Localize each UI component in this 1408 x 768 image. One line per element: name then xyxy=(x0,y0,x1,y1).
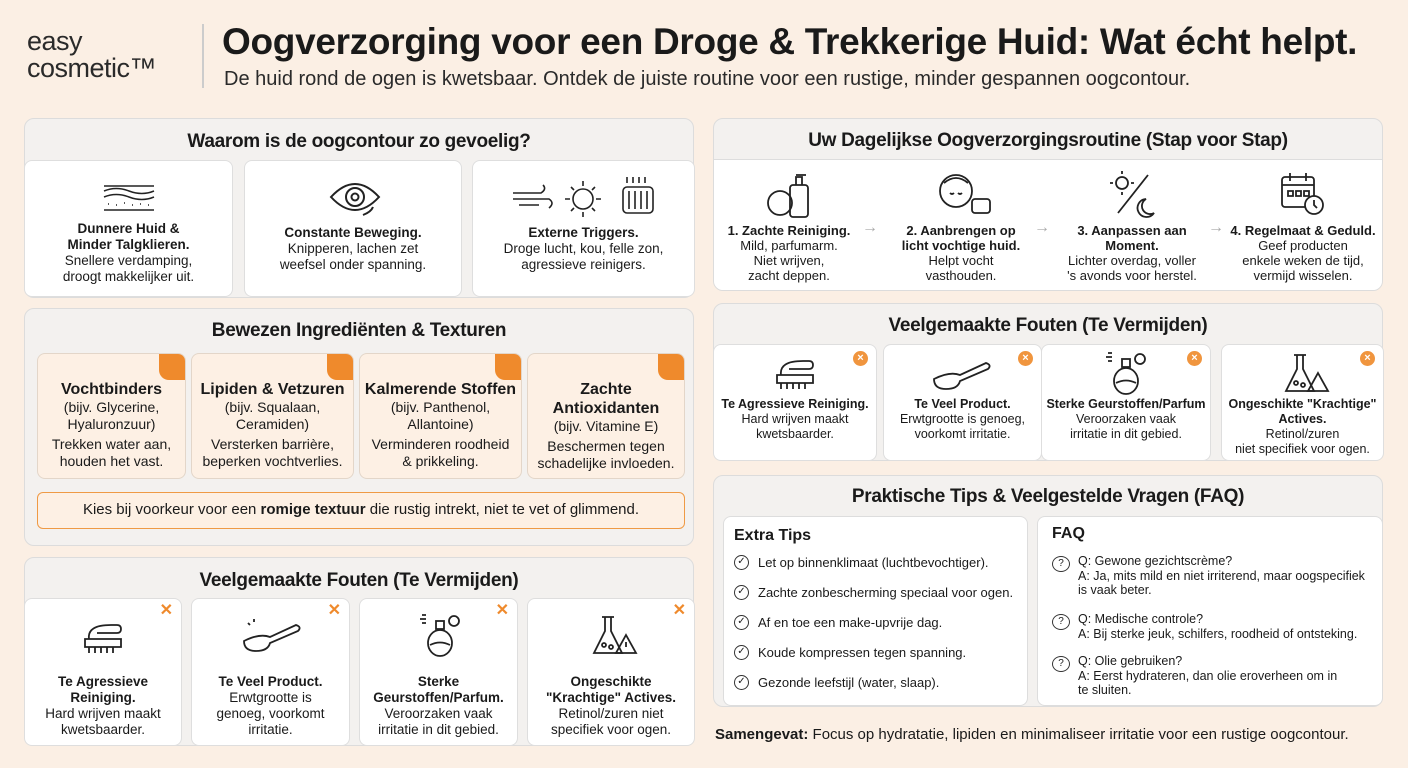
tips box: Let op binnenklimaat (luchtbevochtiger). xyxy=(758,555,989,570)
card: agressief: ✕ xyxy=(160,602,173,619)
heading: Veelgemaakte Fouten (Te Vermijden) xyxy=(889,315,1207,336)
card 3: Veroorzaken vaak xyxy=(1076,412,1176,426)
faq box: ? xyxy=(1058,616,1064,627)
step 2 xyxy=(902,174,1020,283)
card: actives: ✕ xyxy=(673,602,686,619)
card: kalmerend: & prikkeling. xyxy=(402,453,479,469)
card: actives: Retinol/zuren niet xyxy=(558,706,664,721)
step 1: 1. Zachte Reiniging. xyxy=(728,223,850,238)
faq box: FAQ xyxy=(1052,525,1085,542)
step 3: 3. Aanpassen aan xyxy=(1077,223,1187,238)
faq box: te sluiten. xyxy=(1078,683,1132,697)
card 2 xyxy=(883,344,1042,461)
card: lipiden: Ceramiden) xyxy=(236,416,309,432)
card 3: × xyxy=(1191,352,1198,364)
faq box xyxy=(1037,516,1383,706)
card: te veel: ✕ xyxy=(328,602,341,619)
card 4: Actives. xyxy=(1279,412,1326,426)
subtitle: De huid rond de ogen is kwetsbaar. Ontdek de juiste routine voor een rustige, minder gespannen oogcontour. xyxy=(224,68,1190,90)
faq box: Q: Olie gebruiken? xyxy=(1078,654,1182,668)
card: te veel: Te Veel Product. xyxy=(218,674,323,689)
faq box: is vaak beter. xyxy=(1078,583,1152,597)
heading: Bewezen Ingrediënten & Texturen xyxy=(212,320,506,341)
step 3: Lichter overdag, voller xyxy=(1068,253,1196,268)
step 4: 4. Regelmaat & Geduld. xyxy=(1230,223,1376,238)
tips box xyxy=(723,516,1028,706)
heading: Waarom is de oogcontour zo gevoelig? xyxy=(187,131,531,152)
card: te veel: irritatie. xyxy=(248,722,293,737)
card 2: Te Veel Product. xyxy=(914,397,1011,411)
step 1: Mild, parfumarm. xyxy=(740,238,838,253)
card 3: Sterke Geurstoffen/Parfum xyxy=(1046,397,1206,411)
step 1 xyxy=(728,174,850,283)
card 3 xyxy=(1041,344,1211,461)
callout: Kies bij voorkeur voor een romige textuur die rustig intrekt, niet te vet of glimmend. xyxy=(83,501,639,518)
card: movement xyxy=(244,160,462,297)
panel: tips & faq xyxy=(713,475,1383,707)
callout xyxy=(37,492,685,529)
card: thin skin: Dunnere Huid & xyxy=(77,221,180,236)
step 4: Geef producten xyxy=(1258,238,1348,253)
card 1: × xyxy=(857,352,864,364)
card: triggers xyxy=(472,160,695,297)
panel: mistakes right xyxy=(713,303,1383,461)
step 2: 2. Aanbrengen op xyxy=(906,223,1016,238)
tips box: Zachte zonbescherming speciaal voor ogen. xyxy=(758,585,1013,600)
card: kalmerend: (bijv. Panthenol, xyxy=(391,399,490,415)
panel: routine xyxy=(713,118,1383,291)
tips box: ✓ xyxy=(737,586,746,597)
faq box: A: Ja, mits mild en niet irriterend, maar oogspecifiek xyxy=(1078,568,1365,582)
card: antioxidanten: Zachte xyxy=(580,381,632,398)
card: lipiden: Lipiden & Vetzuren xyxy=(200,381,344,398)
faq box: A: Bij sterke jeuk, schilfers, roodheid of ontsteking. xyxy=(1078,626,1357,640)
card: parfum: Veroorzaken vaak xyxy=(384,706,493,721)
card: thin skin: droogt makkelijker uit. xyxy=(63,269,194,284)
card: kalmerend: Kalmerende Stoffen xyxy=(365,381,516,398)
tips box: ✓ xyxy=(737,616,746,627)
step 4 xyxy=(1230,173,1376,283)
card: lipiden: beperken vochtverlies. xyxy=(202,453,343,469)
faq box: Q: Medische controle? xyxy=(1078,612,1203,626)
card: kalmerend xyxy=(359,353,522,479)
arrow: → xyxy=(862,219,878,236)
card: movement: Knipperen, lachen zet xyxy=(288,241,418,256)
card: triggers: agressieve reinigers. xyxy=(521,257,646,272)
card: parfum: irritatie in dit gebied. xyxy=(378,722,499,737)
step 2: licht vochtige huid. xyxy=(902,238,1020,253)
heading: Uw Dagelijkse Oogverzorgingsroutine (Stap voor Stap) xyxy=(808,130,1288,151)
summary: Samengevat: Focus op hydratatie, lipiden en minimaliseer irritatie voor een rustige oogcontour. xyxy=(715,726,1349,743)
card: lipiden xyxy=(191,353,354,479)
card: movement: Constante Beweging. xyxy=(284,225,422,240)
card 4: niet specifiek voor ogen. xyxy=(1235,442,1370,456)
faq box: ? xyxy=(1058,558,1064,569)
card 4: × xyxy=(1364,352,1371,364)
faq box: ? xyxy=(1058,658,1064,669)
card: te veel: Erwtgrootte is xyxy=(229,690,312,705)
logo xyxy=(27,26,156,83)
logo: easy xyxy=(27,26,82,56)
card: thin skin xyxy=(24,160,233,297)
card: thin skin: Snellere verdamping, xyxy=(65,253,192,268)
tips box: Gezonde leefstijl (water, slaap). xyxy=(758,675,939,690)
faq box: Q: Gewone gezichtscrème? xyxy=(1078,554,1232,568)
card: agressief: Hard wrijven maakt xyxy=(45,706,161,721)
tips box: ✓ xyxy=(737,676,746,687)
card: movement: weefsel onder spanning. xyxy=(280,257,426,272)
heading: Praktische Tips & Veelgestelde Vragen (FAQ) xyxy=(852,486,1244,507)
step 3: Moment. xyxy=(1105,238,1159,253)
card: antioxidanten: Beschermen tegen xyxy=(547,438,665,454)
card: vochtbinders: Vochtbinders xyxy=(61,381,162,398)
card: vochtbinders: (bijv. Glycerine, xyxy=(64,399,159,415)
panel: why sensitive xyxy=(24,118,694,298)
card: agressief xyxy=(24,598,182,746)
step 2: Helpt vocht xyxy=(928,253,994,268)
card: kalmerend: Allantoine) xyxy=(407,416,474,432)
step 4: enkele weken de tijd, xyxy=(1242,253,1364,268)
card: antioxidanten: schadelijke invloeden. xyxy=(538,455,674,471)
card: parfum xyxy=(359,598,518,746)
panel: mistakes left xyxy=(24,557,694,746)
card: triggers: Externe Triggers. xyxy=(528,225,639,240)
card 2: Erwtgrootte is genoeg, xyxy=(900,412,1025,426)
card: parfum: Sterke xyxy=(418,674,459,689)
card: lipiden: (bijv. Squalaan, xyxy=(225,399,320,415)
tips box: ✓ xyxy=(737,556,746,567)
tips box: Extra Tips xyxy=(734,527,811,544)
card 3: irritatie in dit gebied. xyxy=(1070,427,1182,441)
card: kalmerend: Verminderen roodheid xyxy=(372,436,509,452)
card: actives: "Krachtige" Actives. xyxy=(546,690,676,705)
card: actives: specifiek voor ogen. xyxy=(551,722,671,737)
card: triggers: Droge lucht, kou, felle zon, xyxy=(504,241,663,256)
card: parfum: ✕ xyxy=(496,602,509,619)
step 4: vermijd wisselen. xyxy=(1254,268,1352,283)
heading: Veelgemaakte Fouten (Te Vermijden) xyxy=(200,570,518,591)
arrow: → xyxy=(1034,219,1050,236)
step 1: zacht deppen. xyxy=(748,268,830,283)
step 3: 's avonds voor herstel. xyxy=(1067,268,1197,283)
card: antioxidanten: (bijv. Vitamine E) xyxy=(554,418,658,434)
card: thin skin: Minder Talgklieren. xyxy=(67,237,190,252)
card: agressief: Te Agressieve xyxy=(58,674,148,689)
tips box: ✓ xyxy=(737,646,746,657)
card: vochtbinders: houden het vast. xyxy=(60,453,163,469)
card: vochtbinders: Trekken water aan, xyxy=(52,436,171,452)
tips box: Af en toe een make-upvrije dag. xyxy=(758,615,942,630)
card: vochtbinders: Hyaluronzuur) xyxy=(68,416,155,432)
card 1: Te Agressieve Reiniging. xyxy=(721,397,869,411)
step 2: vasthouden. xyxy=(926,268,996,283)
card 1 xyxy=(713,344,877,461)
card 2: × xyxy=(1022,352,1029,364)
title: Oogverzorging voor een Droge & Trekkerige Huid: Wat écht helpt. xyxy=(222,21,1357,62)
card 4 xyxy=(1221,344,1384,461)
card: actives: Ongeschikte xyxy=(570,674,652,689)
step 1: Niet wrijven, xyxy=(754,253,824,268)
logo: cosmetic™ xyxy=(27,53,156,83)
step 3 xyxy=(1067,171,1197,283)
card: lipiden: Versterken barrière, xyxy=(211,436,334,452)
arrow: → xyxy=(1208,219,1224,236)
panel: ingredients xyxy=(24,308,694,546)
card: vochtbinders xyxy=(37,353,186,479)
card: agressief: Reiniging. xyxy=(70,690,136,705)
tips box: Koude kompressen tegen spanning. xyxy=(758,645,966,660)
card 4: Retinol/zuren xyxy=(1266,427,1339,441)
card: antioxidanten xyxy=(527,353,685,479)
faq box: A: Eerst hydrateren, dan olie eroverheen om in xyxy=(1078,668,1337,682)
card: parfum: Geurstoffen/Parfum. xyxy=(373,690,504,705)
card 1: Hard wrijven maakt xyxy=(742,412,848,426)
card 1: kwetsbaarder. xyxy=(756,427,834,441)
card: agressief: kwetsbaarder. xyxy=(61,722,145,737)
card: te veel: genoeg, voorkomt xyxy=(216,706,325,721)
card: actives xyxy=(527,598,695,746)
card: te veel xyxy=(191,598,350,746)
card 2: voorkomt irritatie. xyxy=(915,427,1010,441)
card 4: Ongeschikte "Krachtige" xyxy=(1228,397,1376,411)
card: antioxidanten: Antioxidanten xyxy=(553,400,659,417)
